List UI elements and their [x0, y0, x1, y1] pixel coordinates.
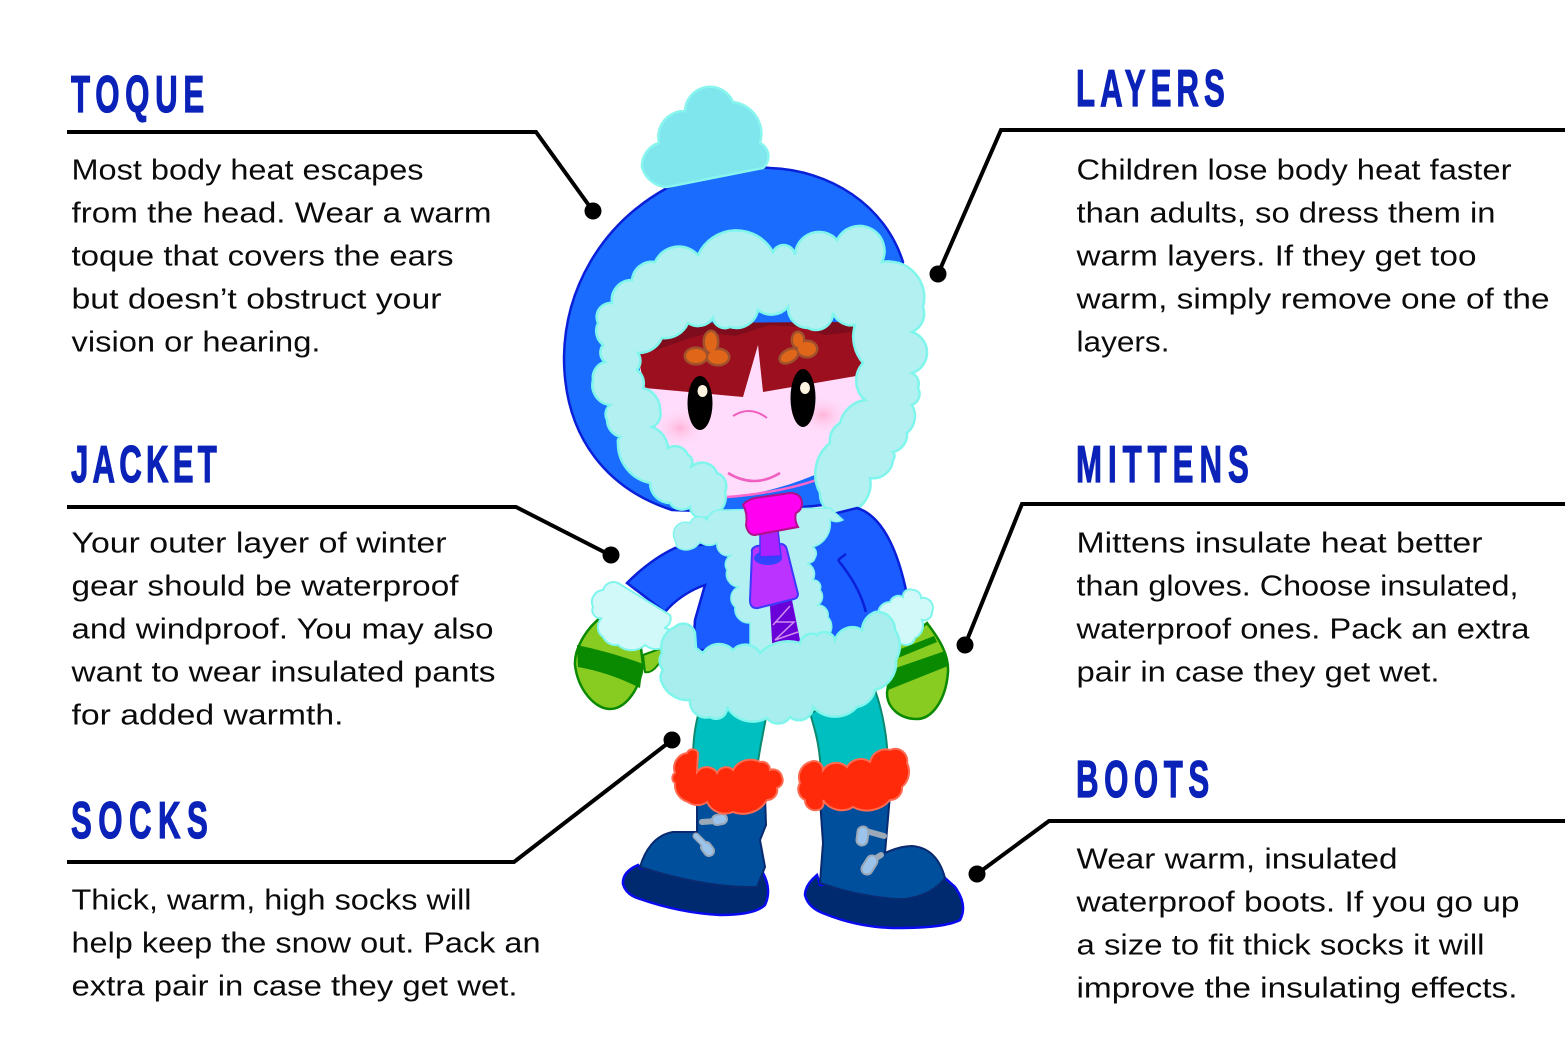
chin shadow line	[727, 476, 827, 497]
mouth	[728, 473, 780, 481]
hair bow right	[777, 332, 817, 366]
panel: jacket	[67, 436, 620, 732]
right mitten cuff	[878, 589, 933, 645]
heading: toque: TOQUE	[71, 66, 204, 124]
leader line: socks	[67, 732, 680, 862]
text: layers: layers.	[1076, 326, 1170, 358]
blush left	[654, 408, 706, 448]
panel: boots	[968, 751, 1565, 1004]
text: mittens: waterproof ones. Pack an extra	[1075, 614, 1530, 646]
hood fur trim	[592, 226, 927, 518]
front and collar fur	[673, 508, 843, 660]
text: layers	[1075, 154, 1550, 358]
text: boots: Wear warm, insulated	[1076, 844, 1398, 876]
text: layers: than adults, so dress them in	[1076, 198, 1496, 230]
face	[640, 335, 875, 498]
text: layers: warm layers. If they get too	[1075, 240, 1476, 272]
text: boots: waterproof boots. If you go up	[1075, 886, 1520, 918]
left leg	[693, 708, 767, 785]
waist fur trim	[660, 612, 900, 724]
leader line: boots	[968, 821, 1565, 882]
left boot	[623, 795, 768, 915]
text: mittens	[1075, 528, 1530, 688]
text: jacket: and windproof. You may also	[72, 614, 494, 646]
left sock fur	[672, 749, 783, 814]
right boot buckles	[862, 831, 884, 869]
left mitten	[575, 618, 662, 709]
text: socks: help keep the snow out. Pack an	[72, 928, 540, 960]
text: toque: but doesn’t obstruct your	[72, 284, 442, 316]
jacket pocket seam	[838, 554, 866, 612]
text: toque	[72, 154, 492, 358]
magenta scarf knot	[743, 493, 802, 535]
right leg	[810, 690, 888, 775]
heading: mittens: MITTENS	[1076, 436, 1249, 494]
leader line: layers	[930, 130, 1565, 282]
left mitten cuff	[592, 582, 673, 650]
text: mittens: Mittens insulate heat better	[1076, 528, 1483, 560]
tie strip	[770, 600, 801, 658]
text: jacket: gear should be waterproof	[72, 570, 460, 602]
text: socks: Thick, warm, high socks will	[72, 884, 472, 916]
text: boots: improve the insulating effects.	[1076, 972, 1518, 1004]
text: toque: toque that covers the ears	[72, 240, 453, 272]
text: toque: Most body heat escapes	[72, 154, 423, 186]
text: socks: extra pair in case they get wet.	[72, 970, 518, 1002]
panel: toque	[67, 66, 602, 359]
text: layers: warm, simply remove one of the	[1075, 284, 1550, 316]
panel: layers	[930, 60, 1565, 358]
text: toque: vision or hearing.	[72, 326, 320, 358]
text: layers: Children lose body heat faster	[1076, 154, 1512, 186]
hair	[637, 322, 868, 397]
blush right	[797, 395, 849, 435]
panel: socks	[67, 732, 680, 1002]
pompom	[642, 87, 768, 187]
text: jacket: for added warmth.	[72, 700, 344, 732]
heading: layers: LAYERS	[1076, 60, 1225, 118]
text: jacket: Your outer layer of winter	[72, 528, 447, 560]
hair bow left	[685, 331, 729, 365]
text: boots	[1075, 844, 1520, 1004]
panel: mittens	[956, 436, 1565, 688]
text: toque: from the head. Wear a warm	[72, 198, 492, 230]
left boot buckles	[696, 819, 722, 851]
text: boots: a size to fit thick socks it will	[1076, 930, 1484, 962]
text: mittens: pair in case they get wet.	[1076, 656, 1440, 688]
text: socks	[72, 884, 540, 1002]
jacket	[627, 508, 907, 650]
right mitten	[887, 623, 948, 719]
leader line: toque	[67, 132, 602, 220]
hood	[564, 167, 903, 511]
eyes	[688, 369, 816, 430]
character: child in winter clothes	[564, 87, 963, 928]
text: jacket: want to wear insulated pants	[70, 656, 495, 688]
leader line: jacket	[67, 507, 620, 564]
heading: jacket: JACKET	[71, 436, 217, 494]
heading: socks: SOCKS	[71, 792, 208, 850]
heading: boots: BOOTS	[1076, 751, 1209, 809]
right boot	[805, 795, 963, 928]
leader line: mittens	[956, 504, 1565, 654]
text: mittens: than gloves. Choose insulated,	[1076, 570, 1518, 602]
text: jacket	[70, 528, 495, 732]
purple scarf	[750, 530, 798, 608]
nose	[733, 411, 767, 418]
right sock fur	[798, 749, 909, 811]
